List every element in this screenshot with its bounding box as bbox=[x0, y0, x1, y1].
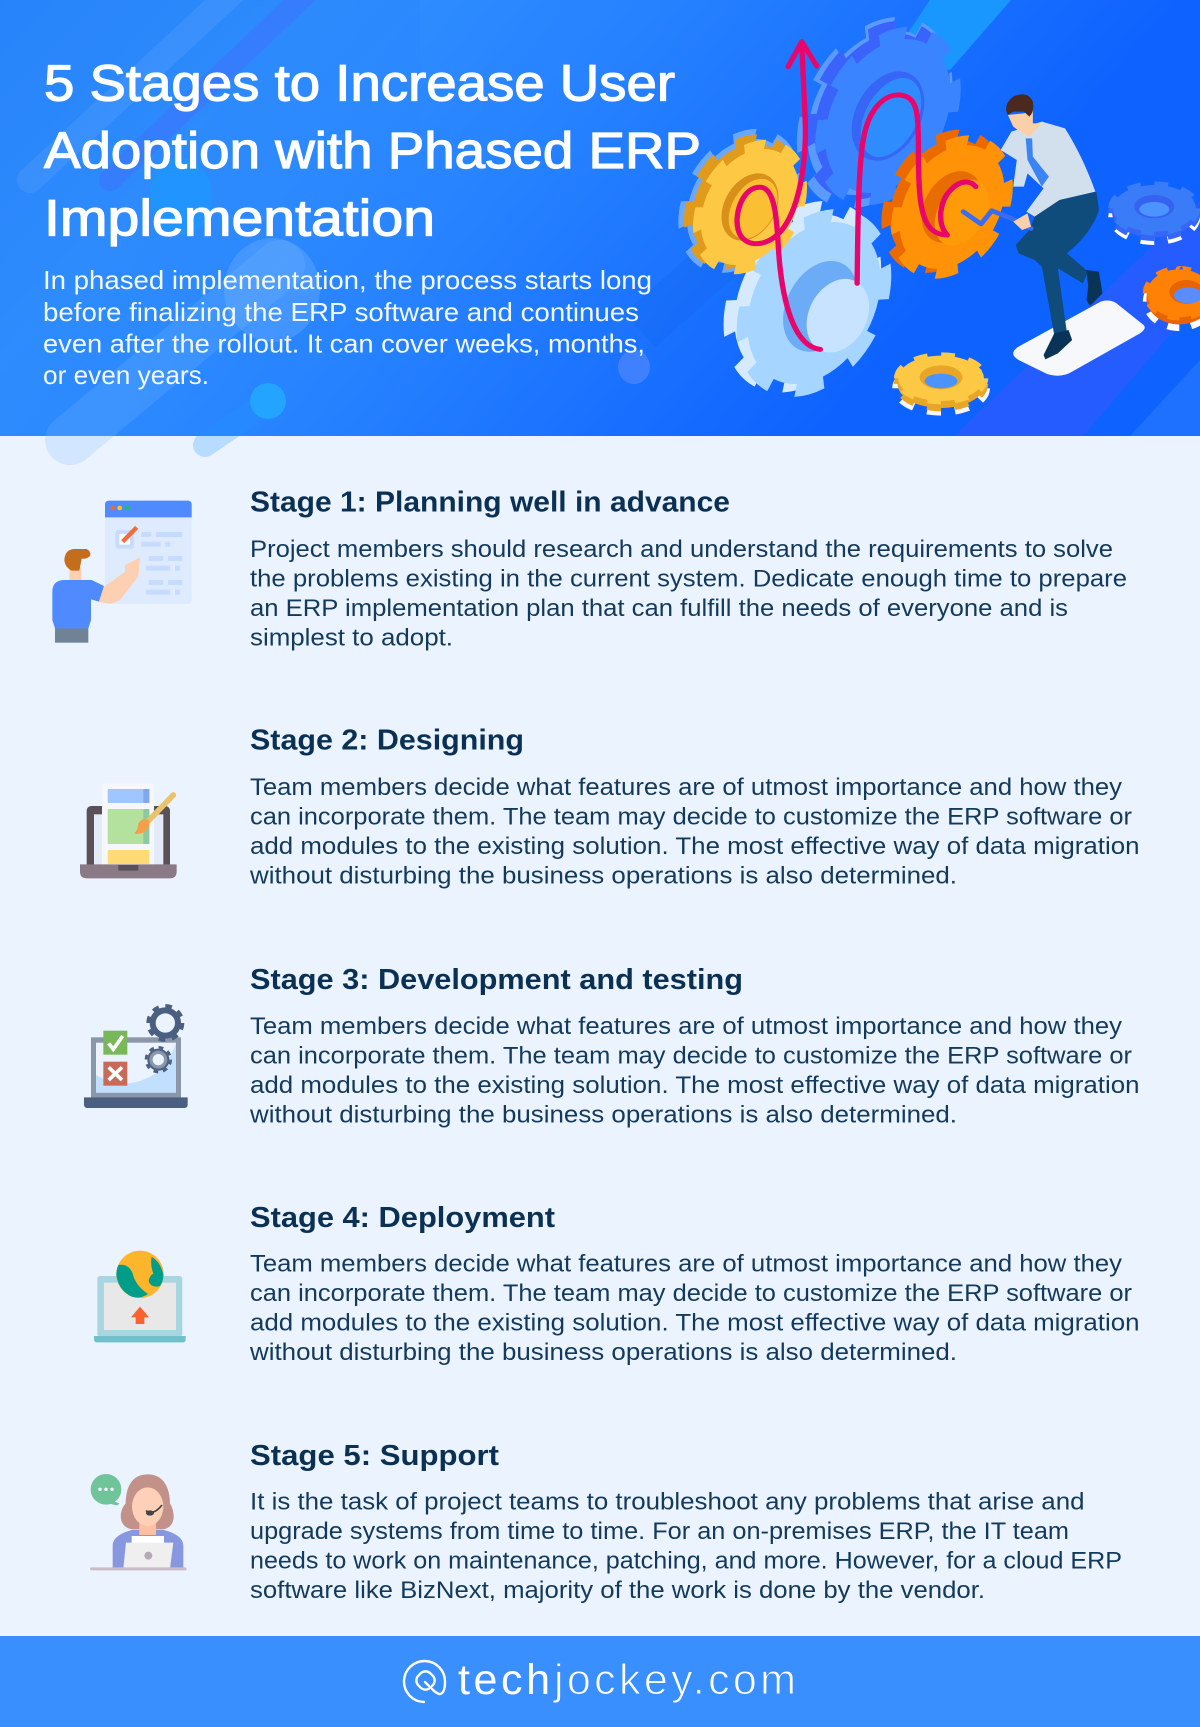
heading: Stage 2: Designing bbox=[250, 724, 524, 756]
drawn in zoomed coordinates bbox=[737, 42, 1200, 412]
heading: Stage 1: Planning well in advance bbox=[250, 486, 730, 518]
body text: simplest to adopt. bbox=[250, 624, 453, 652]
body text: Project members should research and understand the requirements to solve bbox=[250, 536, 1113, 563]
intro paragraph: even after the rollout. It can cover weeks, months, bbox=[43, 328, 645, 358]
body text bbox=[250, 1488, 1122, 1604]
intro paragraph: In phased implementation, the process starts long bbox=[43, 265, 652, 295]
title: Implementation bbox=[44, 190, 435, 246]
body text: without disturbing the business operations is also determined. bbox=[249, 1339, 957, 1366]
icon: light blue gear bbox=[703, 186, 912, 413]
icon: businessman bbox=[963, 94, 1102, 359]
body text bbox=[249, 1013, 1140, 1128]
title: Adoption with Phased ERP bbox=[44, 122, 701, 179]
intro paragraph bbox=[43, 265, 652, 390]
heading: Stage 5: Support bbox=[250, 1440, 499, 1472]
body text: software like BizNext, majority of the work is done by the vendor. bbox=[250, 1577, 985, 1604]
body text bbox=[249, 774, 1140, 890]
brand wordmark: tech bbox=[458, 1656, 550, 1704]
intro paragraph: before finalizing the ERP software and continues bbox=[43, 297, 639, 327]
body text: without disturbing the business operations is also determined. bbox=[249, 1101, 957, 1128]
icon: support agent with headset bbox=[90, 1474, 187, 1570]
body text bbox=[249, 1250, 1140, 1366]
icon: laptop with design mockup and brush bbox=[80, 783, 177, 878]
icon: small blue gear bbox=[1112, 185, 1196, 241]
body text: can incorporate them. The team may decide to customize the ERP software or bbox=[250, 1280, 1132, 1307]
body text: Team members decide what features are of utmost importance and how they bbox=[250, 774, 1122, 801]
body text: can incorporate them. The team may decide to customize the ERP software or bbox=[250, 1042, 1132, 1069]
icon: person presenting a checklist bbox=[52, 501, 192, 643]
body text: Team members decide what features are of utmost importance and how they bbox=[250, 1250, 1122, 1278]
body text: add modules to the existing solution. The most effective way of data migration bbox=[250, 1310, 1140, 1336]
background stripes and bubbles bbox=[30, 0, 1200, 445]
icon: blue gear bbox=[777, 3, 981, 227]
icon: small orange gear bbox=[1146, 269, 1200, 328]
body text: upgrade systems from time to time. For an on-premises ERP, the IT team bbox=[250, 1518, 1069, 1545]
body text: without disturbing the business operations is also determined. bbox=[249, 862, 957, 890]
intro paragraph: or even years. bbox=[43, 360, 209, 390]
icon: laptop with globe and upload arrow bbox=[94, 1251, 186, 1342]
body text: the problems existing in the current system. Dedicate enough time to prepare bbox=[250, 566, 1127, 592]
heading: Stage 3: Development and testing bbox=[250, 964, 743, 996]
icon: orange gear bbox=[866, 117, 1029, 291]
panel: stage 5 bbox=[90, 1440, 1122, 1604]
title bbox=[44, 54, 701, 246]
panel: stage 4 bbox=[94, 1202, 1140, 1366]
body text: can incorporate them. The team may decide to customize the ERP software or bbox=[250, 804, 1132, 830]
body text: add modules to the existing solution. The most effective way of data migration bbox=[250, 833, 1140, 860]
icon: yellow gear bbox=[662, 117, 824, 290]
icon: laptop with test checks and gears bbox=[84, 1006, 188, 1108]
arrow: pink rising line bbox=[737, 42, 976, 349]
body text bbox=[250, 536, 1127, 652]
title: 5 Stages to Increase User bbox=[44, 54, 675, 112]
body text: Team members decide what features are of utmost importance and how they bbox=[250, 1013, 1122, 1040]
brand wordmark: jockey.com bbox=[552, 1656, 796, 1704]
panel: stage 3 bbox=[84, 964, 1140, 1128]
body text: needs to work on maintenance, patching, and more. However, for a cloud ERP bbox=[250, 1547, 1122, 1574]
body text: add modules to the existing solution. The most effective way of data migration bbox=[250, 1072, 1140, 1099]
panel: header banner bbox=[0, 0, 1200, 445]
illustration: gears and businessman bbox=[662, 3, 1200, 413]
panel: footer bbox=[0, 1636, 1200, 1727]
body text: an ERP implementation plan that can fulfill the needs of everyone and is bbox=[250, 595, 1068, 622]
panel: stage 1 bbox=[52, 486, 1127, 652]
icon: techjockey logo mark bbox=[404, 1661, 445, 1702]
icon: small yellow gear bbox=[896, 356, 986, 412]
heading: Stage 4: Deployment bbox=[250, 1202, 555, 1234]
panel: stage 2 bbox=[80, 724, 1139, 890]
white platform bbox=[1013, 301, 1145, 376]
body text: It is the task of project teams to troubleshoot any problems that arise and bbox=[250, 1488, 1084, 1515]
